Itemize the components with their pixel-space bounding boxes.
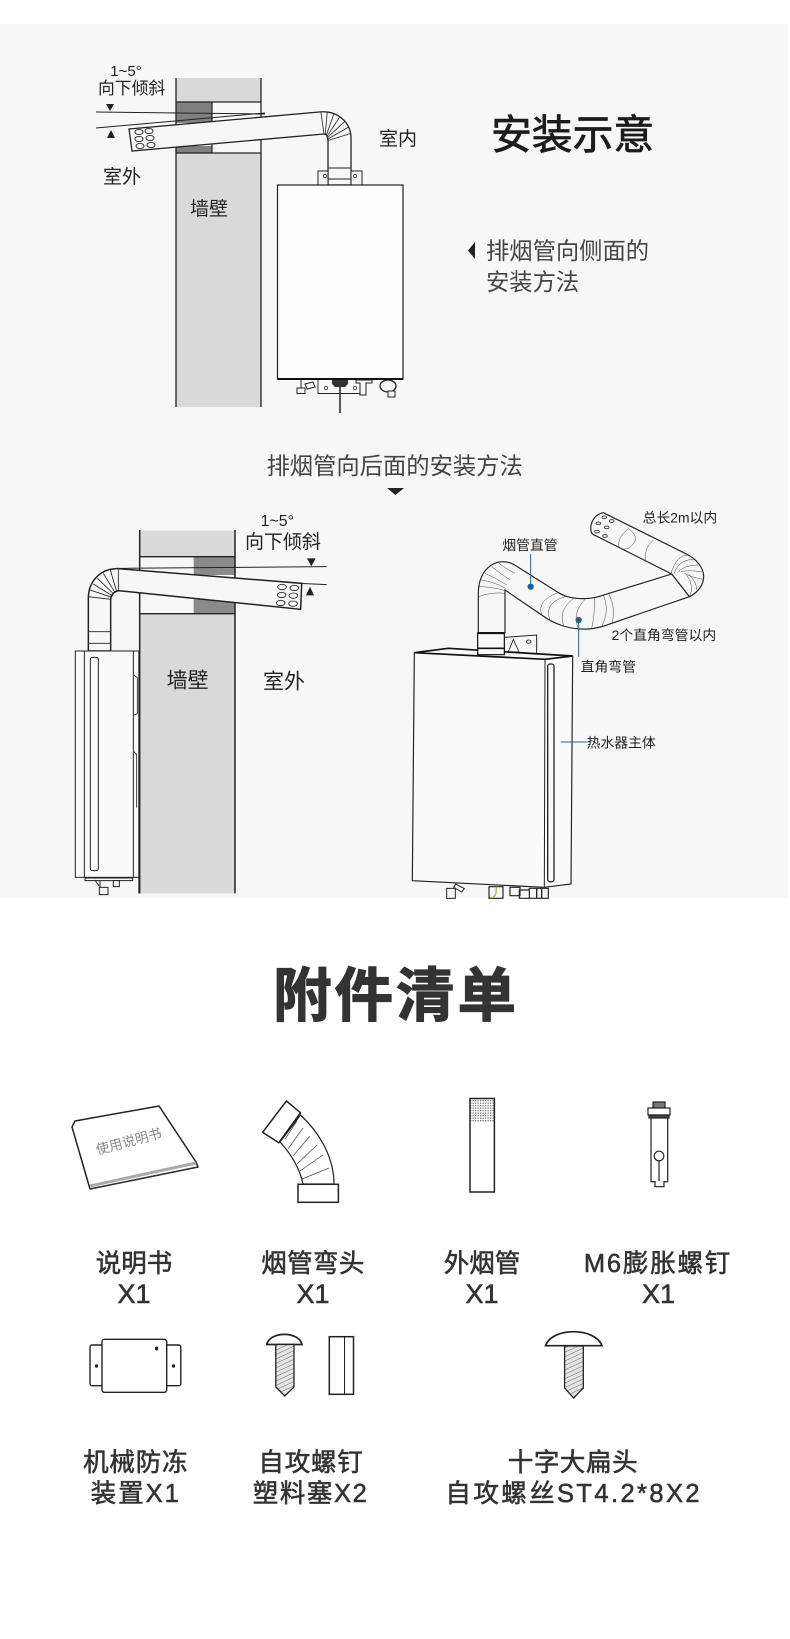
text: side installation method: 排烟管向侧面的 xyxy=(486,238,649,264)
label xyxy=(96,1250,172,1309)
panel: installation diagrams xyxy=(0,24,788,898)
label: M6膨胀螺钉 xyxy=(584,1250,732,1278)
icon: bolt xyxy=(648,1102,670,1187)
label xyxy=(444,1250,520,1309)
label: straight flue pipe: 烟管直管 xyxy=(502,537,558,553)
label: 自攻螺丝ST4.2*8X2 xyxy=(445,1480,702,1508)
icon: down triangle xyxy=(387,488,404,495)
heater mounting bracket xyxy=(504,635,537,654)
item: manual xyxy=(72,1106,198,1309)
callout lines xyxy=(528,554,587,742)
item: outer flue xyxy=(444,1098,520,1309)
heading: installation illustration: 安装示意 xyxy=(491,112,654,158)
label xyxy=(83,1449,188,1508)
label xyxy=(445,1449,702,1508)
heater body xyxy=(412,648,573,898)
label: outdoors: 室外 xyxy=(263,670,305,693)
label: downward slope: 向下倾斜 xyxy=(245,531,321,553)
icon: screw xyxy=(267,1334,302,1396)
label xyxy=(261,1250,365,1309)
label: two elbows max: 2个直角弯管以内 xyxy=(612,627,716,643)
icon: anti-freeze device xyxy=(90,1339,181,1392)
heading: accessories list: 附件清单 xyxy=(273,964,519,1029)
label xyxy=(584,1250,732,1309)
label: 十字大扁头 xyxy=(508,1449,638,1477)
rear wall xyxy=(117,530,327,893)
flue collar xyxy=(478,633,504,655)
label: total length: 总长2m以内 xyxy=(643,509,717,525)
item: large flat-head screw xyxy=(445,1332,702,1508)
icon: elbow xyxy=(263,1101,338,1202)
label: right-angle elbow: 直角弯管 xyxy=(581,659,636,675)
label: heater body: 热水器主体 xyxy=(587,734,656,750)
diagram: side exhaust installation xyxy=(96,63,417,413)
label: angle: 1~5° xyxy=(261,513,294,530)
label: X1 xyxy=(117,1279,151,1309)
item: flue elbow xyxy=(261,1101,365,1309)
label: 烟管弯头 xyxy=(261,1250,365,1278)
label: 机械防冻 xyxy=(83,1449,188,1477)
label: 装置X1 xyxy=(91,1480,181,1508)
label: 说明书 xyxy=(96,1250,172,1278)
label: wall: 墙壁 xyxy=(167,669,209,692)
text: side installation method: 安装方法 xyxy=(486,269,579,295)
item: M6 expansion bolt xyxy=(584,1102,732,1309)
label: indoors: 室内 xyxy=(379,128,417,150)
label xyxy=(253,1449,368,1508)
diagram: pipe routing with water heater xyxy=(412,509,717,898)
corrugation lines xyxy=(478,528,703,628)
text: side installation method xyxy=(486,238,649,295)
label: 外烟管 xyxy=(444,1250,520,1278)
flue pipe assembly xyxy=(478,513,704,633)
icon: manual booklet xyxy=(72,1106,198,1189)
wall xyxy=(176,78,261,407)
item: anti-freeze device xyxy=(83,1339,188,1508)
icon: flat-head screw xyxy=(546,1332,602,1398)
diagram: rear exhaust installation side view xyxy=(75,513,327,895)
label: 自攻螺钉 xyxy=(258,1449,364,1477)
icon: left triangle xyxy=(468,242,475,259)
item: self-tapping screw and plastic plug xyxy=(253,1334,368,1508)
label: outdoors: 室外 xyxy=(103,166,141,188)
text: rear installation method: 排烟管向后面的安装方法 xyxy=(266,453,523,479)
angle guide lines and arrows xyxy=(96,104,265,138)
label: angle: 1~5° xyxy=(110,63,142,80)
label: downward slope: 向下倾斜 xyxy=(98,79,165,98)
label: X1 xyxy=(296,1279,330,1309)
exhaust pipe with elbow xyxy=(129,112,351,185)
label: 塑料塞X2 xyxy=(253,1480,368,1508)
water heater front xyxy=(278,171,403,413)
rear exhaust pipe xyxy=(88,569,302,651)
vent holes xyxy=(595,516,614,537)
icon: outer flue xyxy=(470,1098,494,1192)
label: X1 xyxy=(642,1279,675,1309)
icon: manual booklet: 使用说明书 xyxy=(94,1125,163,1158)
water heater side xyxy=(75,651,139,895)
icon: plastic plug xyxy=(329,1337,354,1394)
label: wall: 墙壁 xyxy=(190,198,228,220)
label: X1 xyxy=(465,1279,499,1309)
